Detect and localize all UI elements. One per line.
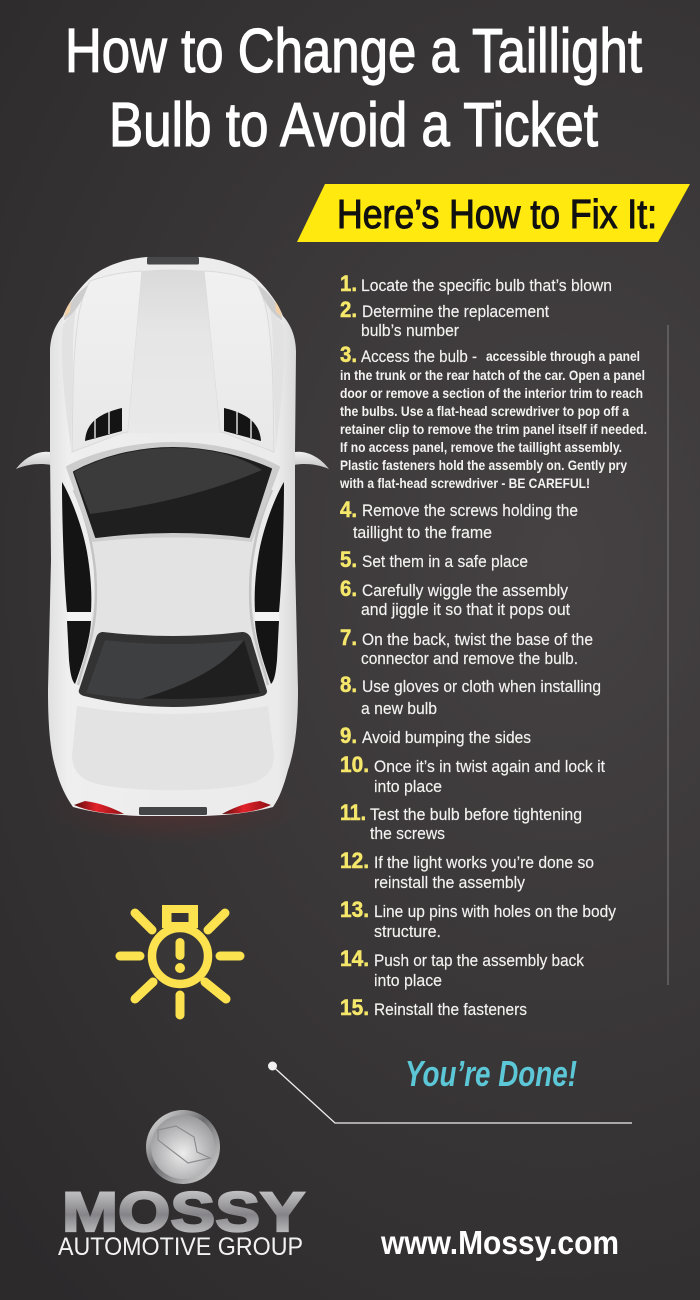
left vent [85, 408, 122, 441]
step 15 [340, 995, 527, 1020]
red taillight glow [43, 772, 303, 844]
right rear side window [255, 621, 279, 684]
step 3: the bulbs. Use a flat-head screwdriver to pop off a [340, 403, 629, 419]
right pillar strip [255, 612, 279, 621]
windshield frame [67, 443, 279, 541]
title: Bulb to Avoid a Ticket [109, 91, 598, 160]
rear window reflection [86, 640, 244, 699]
front bar [147, 257, 199, 264]
hood left panel [72, 271, 142, 452]
pillar lines [74, 490, 272, 685]
step 7: 7. [340, 625, 357, 650]
step 3: 3. [340, 342, 357, 367]
step 7: On the back, twist the base of the [362, 630, 593, 649]
step 9: 9. [340, 723, 357, 748]
logo: Mossy Automotive Group [58, 1110, 305, 1261]
step 3: retainer clip to remove the trim panel itself if needed. [340, 421, 647, 437]
logo emblem [146, 1110, 220, 1184]
left front side window [62, 482, 91, 612]
step 11: 11. [340, 800, 366, 825]
step 12: reinstall the assembly [374, 873, 525, 892]
rear deck panel [72, 706, 274, 790]
step 13: structure. [374, 922, 441, 941]
step 4: Remove the screws holding the [362, 501, 578, 520]
step 5: 5. [340, 547, 357, 572]
step 2: Determine the replacement [362, 302, 549, 321]
step 13: Line up pins with holes on the body [374, 902, 616, 921]
step 3: in the trunk or the rear hatch of the car. Open a panel [340, 367, 645, 383]
step 3: Access the bulb - [361, 347, 477, 366]
banner: Here's How to Fix It [297, 184, 690, 242]
step 8: a new bulb [361, 699, 437, 718]
step 9 [340, 723, 531, 748]
icon: warning light bulb [120, 905, 240, 1015]
you're done callout: You’re Done! [405, 1053, 577, 1094]
step 6 [340, 576, 570, 619]
step 2: bulb’s number [361, 321, 459, 340]
step 5: Set them in a safe place [362, 552, 528, 571]
step 11 [340, 800, 582, 843]
rear window glass [86, 640, 260, 699]
step 13: 13. [340, 897, 369, 922]
rear plate bar [139, 807, 207, 815]
left mirror [16, 452, 51, 469]
step 12: 12. [340, 848, 369, 873]
left taillight [74, 801, 124, 814]
roof and pillars [67, 443, 279, 694]
step 10: into place [374, 777, 442, 796]
step 3: door or remove a section of the interior trim to reach [340, 385, 643, 401]
right taillight [222, 801, 271, 814]
step 8 [340, 672, 601, 718]
step 10: Once it’s in twist again and lock it [374, 757, 605, 776]
windshield reflection [74, 448, 262, 514]
hood centre stripe [128, 270, 220, 434]
step 11: the screws [370, 824, 445, 843]
logo tagline: AUTOMOTIVE GROUP [58, 1233, 303, 1261]
step 7: connector and remove the bulb. [361, 649, 578, 668]
step 5 [340, 547, 528, 572]
step 14: Push or tap the assembly back [374, 951, 584, 970]
step 3 [339, 342, 647, 491]
step 14: 14. [340, 946, 369, 971]
step 3: Plastic fasteners hold the assembly on. Gently pry [340, 457, 627, 473]
step 2 [340, 297, 549, 340]
hood right panel [204, 271, 274, 452]
step 4 [340, 497, 578, 542]
windshield glass [74, 448, 271, 537]
step 15: Reinstall the fasteners [374, 1000, 527, 1019]
step 1: Locate the specific bulb that’s blown [361, 276, 612, 295]
step 3: accessible through a panel [486, 348, 640, 364]
steps list [339, 271, 647, 1020]
fender strips [62, 308, 76, 448]
callout pointer line [268, 1062, 632, 1123]
step 7 [340, 625, 593, 668]
step 4: taillight to the frame [353, 523, 492, 542]
step 8: 8. [340, 672, 357, 697]
rear window frame [79, 632, 267, 707]
step 6: Carefully wiggle the assembly [362, 581, 568, 600]
step 3: with a flat-head screwdriver - BE CAREFUL! [339, 475, 590, 491]
left headlight [64, 285, 88, 320]
step 10 [340, 752, 605, 796]
step 3: If no access panel, remove the taillight assembly. [340, 439, 622, 455]
step 12: If the light works you’re done so [374, 853, 594, 872]
website url: www.Mossy.com [380, 1224, 619, 1261]
step 1 [340, 271, 612, 296]
logo wordmark: MOSSY [62, 1180, 305, 1243]
right vent [224, 408, 261, 441]
left pillar strip [67, 612, 91, 621]
step 13 [340, 897, 616, 941]
step 14 [340, 946, 584, 990]
car illustration, top view [16, 257, 329, 844]
right mirror [294, 452, 329, 469]
roof panel [93, 538, 253, 632]
step 15: 15. [340, 995, 369, 1020]
step 10: 10. [340, 752, 369, 777]
step 2: 2. [340, 297, 357, 322]
step 4: 4. [340, 497, 357, 522]
step 6: and jiggle it so that it pops out [361, 600, 570, 619]
title [65, 17, 642, 160]
step 8: Use gloves or cloth when installing [362, 677, 601, 696]
left rear side window [67, 621, 91, 684]
right headlight [258, 285, 282, 320]
right front side window [255, 482, 284, 612]
step 9: Avoid bumping the sides [362, 728, 531, 747]
car body [48, 257, 298, 816]
step 14: into place [374, 971, 442, 990]
step 1: 1. [340, 271, 357, 296]
step 6: 6. [340, 576, 357, 601]
step 12 [340, 848, 594, 892]
banner: Here's How to Fix It: Here’s How to Fix It: [337, 191, 657, 237]
step 11: Test the bulb before tightening [370, 805, 582, 824]
